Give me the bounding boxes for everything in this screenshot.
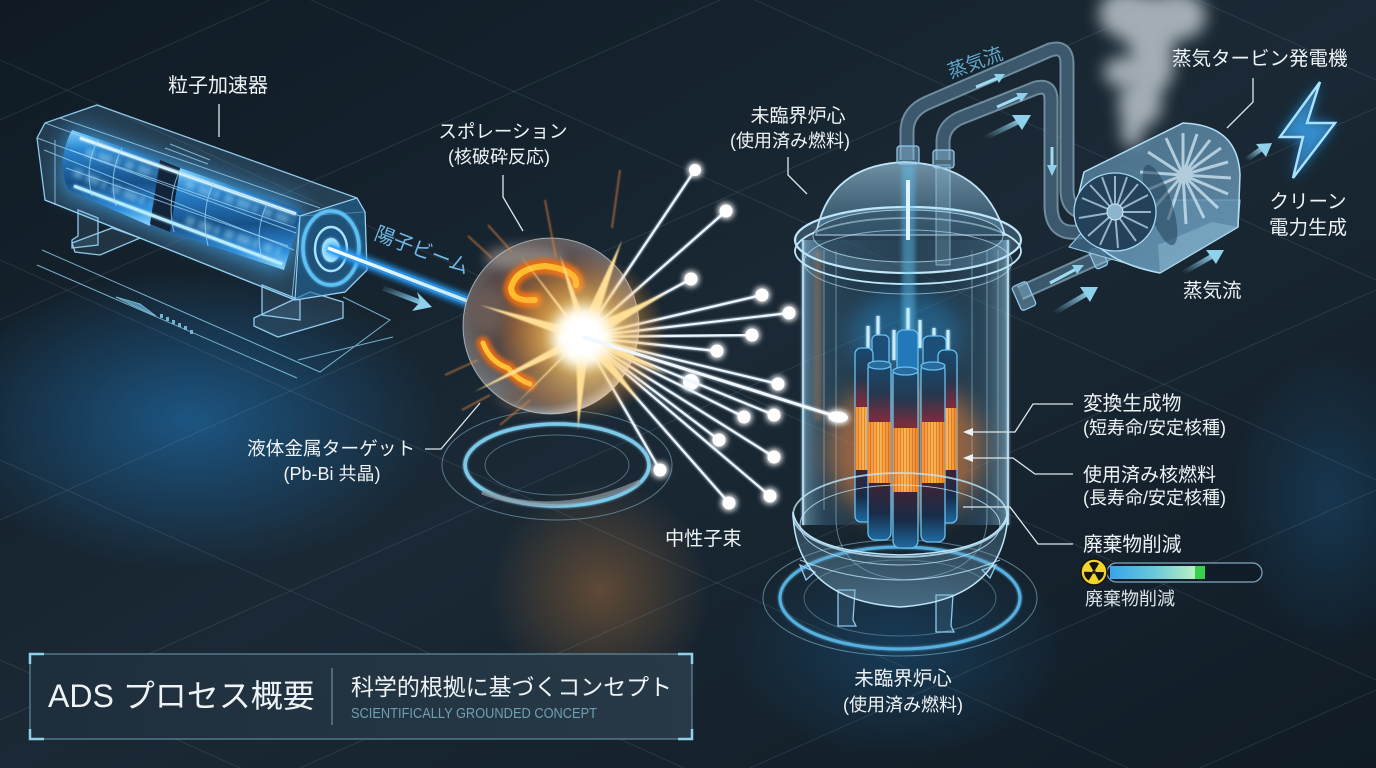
pipe: return	[1020, 252, 1111, 293]
neutron ray 12	[583, 337, 780, 464]
neutron ray 4	[583, 288, 768, 337]
molten metal swirls	[483, 266, 576, 384]
label: proton beam: 陽子ビーム	[371, 222, 472, 279]
label: subcritical core top: 未臨界炉心	[750, 105, 846, 127]
panel corner accents	[30, 654, 692, 739]
fuel rod tips	[868, 308, 948, 368]
pipe: dark core inner	[943, 87, 1100, 232]
steam pipes	[897, 49, 1111, 311]
explosion core	[555, 309, 611, 365]
turbine casing	[1075, 123, 1240, 273]
callout: waste reduction: 廃棄物削減	[1083, 534, 1182, 556]
label: neutron flux: 中性子束	[665, 528, 742, 550]
reactor coolant stream	[902, 165, 950, 350]
label: subcritical core bottom	[843, 668, 963, 715]
liquid metal target sphere	[463, 238, 639, 414]
callout: spent nuclear fuel	[963, 454, 1226, 508]
label: spallation: (核破砕反応)	[448, 147, 550, 167]
neutron ray 3	[583, 272, 698, 337]
neutron ray 5	[583, 306, 796, 337]
panel english subtitle: SCIENTIFICALLY GROUNDED CONCEPT	[351, 705, 597, 722]
arrow: in pipe 1	[976, 74, 1005, 87]
arrow: down pipe	[1047, 147, 1057, 176]
label: subcritical core top	[730, 105, 850, 194]
progress bar: waste reduction	[1107, 563, 1262, 582]
label: steam flow lower: 蒸気流	[1183, 280, 1242, 302]
icon: lightning bolt	[1280, 82, 1335, 178]
reactor lower flange	[793, 473, 1007, 580]
pipe: inner	[943, 87, 1100, 232]
neutron ray 1	[583, 164, 701, 337]
steam plume	[1099, 0, 1206, 148]
neutron ray 15	[583, 337, 666, 476]
liquid metal target ring	[442, 410, 672, 520]
accelerator beam port	[303, 211, 359, 285]
reactor body walls	[803, 240, 1008, 525]
particle accelerator	[37, 105, 393, 378]
neutron ray 11	[583, 337, 726, 446]
pipe: return core	[1020, 252, 1111, 293]
reactor lower bowl	[793, 512, 1008, 607]
accelerator floor outline	[37, 250, 393, 378]
turbine front wheel	[1074, 173, 1156, 251]
reactor floor ring	[763, 540, 1037, 656]
neutron ray 6	[583, 328, 758, 342]
orange sparks	[445, 170, 620, 425]
panel title: ADS プロセス概要	[48, 678, 315, 714]
reactor body	[803, 240, 1008, 525]
pipe: dark core	[907, 49, 1111, 213]
fuel rod front centre	[893, 367, 918, 548]
cylinder texture	[74, 152, 294, 252]
neutron ray 10	[583, 337, 750, 424]
neutron ray 2	[583, 204, 732, 337]
accelerator housing	[37, 105, 367, 300]
turbine rear blades	[1140, 133, 1231, 224]
label: steam turbine generator	[1172, 48, 1348, 128]
arrow: under turbine	[1183, 250, 1224, 273]
label: clean power: クリーン	[1269, 191, 1347, 213]
sphere surface texture	[470, 246, 571, 410]
reactor fuel assembly	[855, 308, 957, 548]
arrow: to generator	[1246, 143, 1272, 160]
arrow: return pipe	[1050, 265, 1084, 283]
panel subtitle: 科学的根拠に基づくコンセプト	[351, 674, 672, 700]
arrow: steam to upper pipe	[985, 115, 1031, 138]
subcritical reactor	[583, 162, 1037, 656]
neutron ray 14	[583, 337, 736, 510]
label: steam flow upper: 蒸気流	[945, 43, 1006, 83]
turbine base	[1069, 200, 1240, 273]
reactor inner liner	[824, 250, 998, 580]
accelerator housing edges	[37, 118, 365, 300]
label: clean power	[1269, 191, 1347, 239]
callout: waste reduction	[963, 507, 1262, 609]
reactor inner blue glow	[850, 290, 960, 380]
label: spallation	[438, 121, 568, 231]
label: liquid metal target	[247, 403, 480, 484]
reactor orange glow	[827, 378, 983, 522]
callout: spent nuclear fuel: 使用済み核燃料	[1083, 464, 1216, 486]
explosion spikes	[474, 240, 668, 430]
accelerator supports	[72, 210, 343, 337]
label: spallation: スポレーション	[438, 121, 568, 142]
fuel rod front right	[921, 362, 945, 542]
neutron ray 8	[583, 337, 784, 390]
label: subcritical core bottom: 未臨界炉心	[854, 668, 952, 690]
arrow: return line	[1054, 287, 1098, 313]
accelerator inner glowing cylinder	[62, 128, 302, 272]
callout: waste reduction: 廃棄物削減	[1085, 589, 1175, 609]
label: subcritical core bottom: (使用済み燃料)	[843, 695, 963, 715]
turbine front blades	[1079, 176, 1151, 248]
turbine hub shade	[1136, 161, 1184, 249]
callout: spent nuclear fuel: (長寿命/安定核種)	[1083, 488, 1226, 508]
reactor dome	[816, 162, 1005, 235]
label: steam turbine generator: 蒸気タービン発電機	[1172, 48, 1348, 70]
pipe: outer	[907, 49, 1111, 213]
neutron ray 9	[583, 337, 780, 422]
accelerator end face	[295, 198, 367, 300]
label: particle accelerator	[168, 74, 268, 137]
icon: radiation hazard	[1081, 559, 1107, 585]
arrow: proton beam direction	[383, 288, 432, 311]
callout: transmutation products: (短寿命/安定核種)	[1083, 418, 1226, 438]
arrow: in pipe 2	[997, 93, 1028, 107]
back fuel rods	[872, 330, 946, 406]
neutron ray 13	[583, 337, 776, 502]
callout: transmutation products	[963, 393, 1226, 438]
label: liquid metal target: (Pb-Bi 共晶)	[283, 464, 381, 484]
proton beam	[328, 248, 470, 302]
turbine box face	[1158, 222, 1238, 273]
reactor legs	[800, 565, 996, 632]
panel divider	[331, 668, 333, 725]
label: particle accelerator: 粒子加速器	[168, 74, 268, 97]
reactor upper flange	[795, 207, 1021, 294]
long neutron ray entering reactor	[583, 337, 849, 424]
label: subcritical core top: (使用済み燃料)	[730, 131, 850, 151]
fuel rod right back	[938, 350, 957, 523]
neutron rays	[583, 164, 796, 510]
spallation explosion	[445, 170, 668, 430]
pipe collars	[897, 146, 1108, 311]
neutron ray 7	[583, 337, 724, 358]
flow arrows	[976, 74, 1272, 313]
turbine hub	[1107, 204, 1123, 220]
steam turbine generator	[1069, 123, 1240, 273]
label: clean power: 電力生成	[1269, 217, 1347, 239]
title panel	[30, 654, 692, 739]
reactor left orange reflection	[814, 250, 822, 420]
fuel rod left back	[855, 348, 873, 522]
label: liquid metal target: 液体金属ターゲット	[247, 438, 415, 459]
fuel rod front left	[868, 361, 891, 540]
callout: transmutation products: 変換生成物	[1083, 393, 1181, 415]
